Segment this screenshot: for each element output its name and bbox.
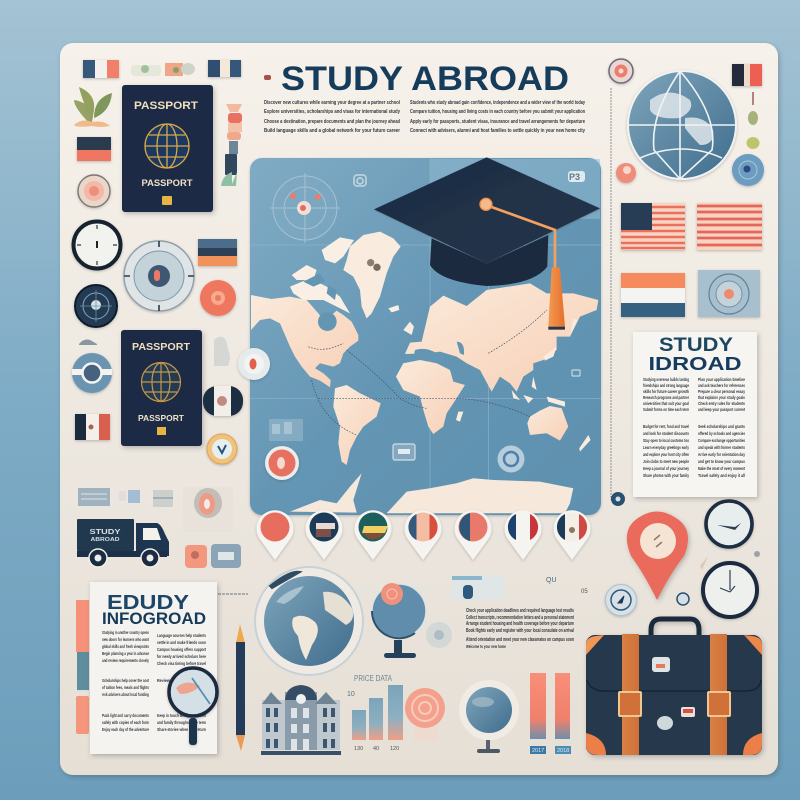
document text left: universities that suit your goal — [643, 401, 689, 407]
text block: lower middle: Attend orientation and meet your new classmates on campus soon — [466, 637, 574, 643]
text block: lower middle: Book flights early and register with your local consulate on arrival — [466, 628, 574, 634]
document text left: Learn everyday greetings early — [643, 445, 689, 451]
document: Study Idroad: STUDY — [659, 335, 733, 356]
flag: top left tricolor — [83, 60, 119, 78]
luggage stickers — [652, 657, 695, 730]
icon: small dots near pin — [677, 551, 760, 605]
pin: navy — [306, 510, 342, 560]
document: Edudy Infogroad: INFOGROAD — [102, 609, 206, 628]
document: Edudy Infogroad — [90, 582, 217, 754]
map blue coin — [498, 446, 524, 472]
pin: Mexico — [554, 510, 591, 560]
icon: small stamps row — [78, 488, 173, 507]
icon: coral rose — [405, 688, 445, 740]
icon: location pin large — [627, 512, 688, 600]
travel route lines — [308, 310, 547, 435]
icon: small desk globe — [372, 583, 426, 658]
icon: round globe with stand — [459, 680, 519, 753]
flag: orange white blue — [621, 273, 685, 317]
document text left: friendships and strong language — [643, 383, 689, 389]
document text left: global skills and fresh viewpoints — [102, 644, 149, 650]
icon: blue ripple coin — [732, 154, 764, 186]
icon: gold badge — [207, 434, 237, 464]
bar chart: blue bars: PRICE DATA — [354, 674, 393, 683]
icon: passport second — [121, 330, 202, 446]
icon: delivery truck: ABROAD — [90, 537, 120, 543]
document text right: Check visa timing before travel — [157, 661, 206, 667]
document text right — [157, 633, 206, 733]
icon: rose stamp — [78, 175, 110, 207]
document text left: Stay open to local customs too — [643, 438, 689, 444]
map radar icon — [270, 173, 340, 243]
passport emblem — [145, 124, 189, 168]
icon: clock bottom — [703, 563, 757, 617]
text block: lower middle: Welcome to your new home — [466, 644, 506, 650]
icon: wire globe top right — [628, 71, 736, 179]
document text left: safely with copies of each form — [102, 720, 149, 726]
icon: passport top: PASSPORT — [134, 100, 198, 112]
document text right: Arrive early for orientation day — [698, 452, 745, 458]
text block: lower middle — [452, 575, 588, 650]
handle — [651, 619, 699, 637]
map coin red — [265, 446, 299, 480]
document: Edudy Infogroad: EDUDY — [107, 592, 190, 614]
text block: lower middle: 05 — [581, 589, 588, 595]
bar chart: blue bars: 40 — [373, 746, 379, 752]
icon: compass badge — [606, 584, 636, 616]
map ticket icon — [393, 444, 415, 460]
document text right: Seek scholarships and grants — [698, 424, 745, 430]
truck wheels — [89, 549, 159, 567]
document text left: Share photos with your family — [643, 473, 689, 479]
Southeast Asia islands — [512, 377, 565, 407]
text block: intro left column: Discover new cultures while earning your degree at a partner school — [264, 100, 400, 106]
buckles — [619, 692, 641, 716]
dashed separator — [218, 593, 248, 595]
icon: graduation cap — [374, 157, 600, 330]
document text right: Make the most of every moment — [698, 466, 745, 472]
text block: intro left column — [264, 100, 401, 134]
icon: medallion with box — [183, 487, 233, 532]
Africa — [396, 360, 465, 434]
document text right: Share stories when you return — [157, 727, 206, 733]
document text left: Research programs and partner — [643, 395, 689, 401]
icon: passport second: PASSPORT — [132, 342, 190, 353]
flag: navy and coral — [77, 137, 111, 161]
pin: tricolor vertical — [404, 510, 441, 560]
icon: pencil — [236, 624, 245, 751]
icon: leaf — [74, 87, 112, 127]
icon: clock top — [706, 501, 752, 547]
icon: highlighter strip — [76, 600, 89, 734]
document text right: and keep your passport current — [698, 407, 745, 413]
icon: magnifying glass — [169, 668, 217, 745]
icon: dark target — [75, 285, 117, 327]
bar chart: blue bars — [347, 674, 403, 752]
straps — [622, 634, 639, 755]
South America — [333, 385, 381, 465]
globe land — [292, 616, 318, 660]
text block: lower middle: Collect transcripts, recommendation letters and a personal statement — [466, 615, 574, 621]
icon: faint coin — [426, 622, 452, 648]
icon: delivery truck — [77, 519, 169, 567]
document text right: Check entry rules for students — [698, 401, 745, 407]
Antarctica — [290, 473, 573, 513]
icon: university building — [261, 685, 341, 755]
document text right: that explains your study goals — [698, 395, 745, 401]
icon: target dial — [124, 241, 194, 311]
icon: small blue node — [611, 492, 625, 506]
document text right: Compare exchange opportunities — [698, 438, 745, 444]
tassel cord — [486, 205, 555, 268]
document text right: and ask teachers for references — [698, 383, 745, 389]
dotted vertical line — [610, 88, 612, 500]
document text left — [643, 377, 689, 479]
bar chart: coral bars: 2017 — [532, 748, 544, 754]
icon: clock left — [74, 222, 120, 268]
tassel — [548, 267, 565, 327]
Eurasia — [405, 283, 598, 392]
document text right: and speak with former students — [698, 445, 745, 451]
text block: lower middle: Arrange student housing and health coverage before your departure — [466, 621, 574, 627]
text block: intro left column: Explore universities, scholarships and visas for international study — [264, 109, 401, 115]
document text left: Join clubs to meet new people — [643, 459, 689, 465]
document text left: Begin planning a year in advance — [102, 651, 149, 657]
bar chart: blue bars: 120 — [390, 746, 399, 752]
document text right: and family throughout the term — [157, 720, 206, 726]
document text left: Scholarships help cover the cost — [102, 678, 149, 684]
document text right: Plan your application timeline — [698, 377, 745, 383]
text block: lower middle: QU — [546, 577, 556, 584]
document text left: Studying overseas builds lasting — [643, 377, 689, 383]
globe clouds — [650, 92, 713, 145]
Canadian Arctic islands — [290, 237, 354, 313]
icon: blue split circle — [72, 353, 112, 393]
icon: passport top — [122, 85, 213, 212]
text block: intro left column: Choose a destination, prepare documents and plan the journey ahead — [264, 119, 400, 125]
document text left — [102, 630, 149, 733]
icon: top right rose stamp — [609, 59, 633, 83]
pin: red — [256, 510, 293, 560]
icon: ornament column — [221, 104, 242, 186]
Greenland — [343, 232, 401, 318]
document text left: skills for future career growth — [643, 389, 689, 395]
map small chart — [269, 419, 303, 441]
stamps strip — [131, 63, 195, 76]
text block: intro right column: Students who study abroad gain confidence, independence and a wider view of the world today — [410, 100, 586, 106]
flag: striped — [697, 203, 762, 250]
document text left: Budget for rent, food and travel — [643, 424, 689, 430]
flag: top right tricolor — [732, 64, 762, 86]
icon: large globe — [255, 567, 363, 675]
pin: France — [504, 510, 542, 560]
flag: slate and orange — [198, 239, 237, 266]
text block: intro right column: Compare tuition, housing and living costs in each country before you submit your application — [410, 109, 585, 115]
icon: passport top: PASSPORT — [142, 178, 193, 189]
text block: intro right column: Apply early for passports, student visas, insurance and travel arrangements for departure — [410, 119, 585, 125]
passport emblem — [142, 362, 180, 402]
bar chart: coral bars: 2018 — [557, 748, 569, 754]
document text left: new doors for learners who want — [102, 637, 149, 643]
icon: target square — [698, 270, 760, 317]
document text left: Ask advisers about local funding — [102, 692, 149, 698]
icon: small clip — [79, 340, 97, 345]
map label top right — [568, 171, 585, 182]
map small marker top — [354, 175, 366, 186]
flag: Mexico style left — [75, 414, 110, 440]
icon: side coin on map edge — [238, 348, 270, 380]
document text left: Keep a journal of your journey — [643, 466, 689, 472]
icon: small hanging ornaments — [746, 92, 760, 149]
flag: United States — [621, 203, 685, 250]
document text left: of tuition fees, meals and flights — [102, 685, 149, 691]
document: Study Idroad — [633, 332, 757, 497]
document text right: and get to know your campus — [698, 459, 745, 465]
document text right: Travel safely and enjoy it all — [698, 473, 745, 479]
document text right: Keep in touch with your school — [157, 713, 206, 719]
document text right: settle in and make friends soon — [157, 640, 206, 646]
icon: orange coin — [200, 280, 236, 316]
document text left: and look for student discounts — [643, 431, 689, 437]
icon: delivery truck: STUDY — [90, 527, 120, 536]
pin: blue and coral — [454, 510, 492, 560]
document text left: Pack light and carry documents — [102, 713, 149, 719]
icon: passport second: PASSPORT — [138, 413, 185, 423]
icon: suitcase — [586, 619, 762, 755]
title: STUDY ABROAD — [281, 60, 569, 98]
map panel — [250, 158, 601, 515]
map continents — [250, 158, 601, 513]
document text right: Prepare a clear personal essay — [698, 389, 745, 395]
document text right: Language courses help students — [157, 633, 206, 639]
map small badge — [572, 370, 580, 376]
icon: coral coin — [616, 163, 636, 183]
document text right: for newly arrived scholars here — [157, 654, 206, 660]
Australia — [527, 406, 568, 441]
icon: coral and blue tags — [185, 544, 241, 568]
text block: intro left column: Build language skills and a global network for your future career — [264, 128, 401, 134]
document: Study Idroad: IDROAD — [648, 354, 742, 374]
location pins row — [256, 510, 591, 560]
icon: hanging figure — [214, 337, 230, 366]
document text right: offered by schools and agencies — [698, 431, 745, 437]
bar chart: blue bars: 10 — [347, 691, 355, 698]
document text left: and review requirements closely — [102, 658, 149, 664]
document text left: and explore your host city often — [643, 452, 689, 458]
flag: top second tricolor — [208, 60, 241, 77]
document text right — [698, 377, 745, 479]
pin: green and yellow — [354, 510, 392, 560]
document text left: Enjoy each day of the adventure — [102, 727, 149, 733]
document text left: Studying in another country opens — [102, 630, 149, 636]
corners — [586, 635, 604, 655]
document text right: Campus housing offers support — [157, 647, 206, 653]
text block: intro right column: Connect with advisers, alumni and host families to settle quickly in your new home city — [410, 128, 586, 134]
document text left: Submit forms on time each term — [643, 407, 689, 413]
text block: lower middle: Check your application deadlines and required language test results — [466, 608, 574, 614]
North America — [251, 295, 358, 387]
text block: intro right column — [410, 100, 586, 134]
document text right: Review all — [157, 678, 175, 684]
bar chart: blue bars: 130 — [354, 746, 363, 752]
bar chart: coral bars — [530, 673, 571, 754]
icon: dark pill badge — [203, 386, 243, 416]
map label top right: P3 — [569, 172, 580, 182]
